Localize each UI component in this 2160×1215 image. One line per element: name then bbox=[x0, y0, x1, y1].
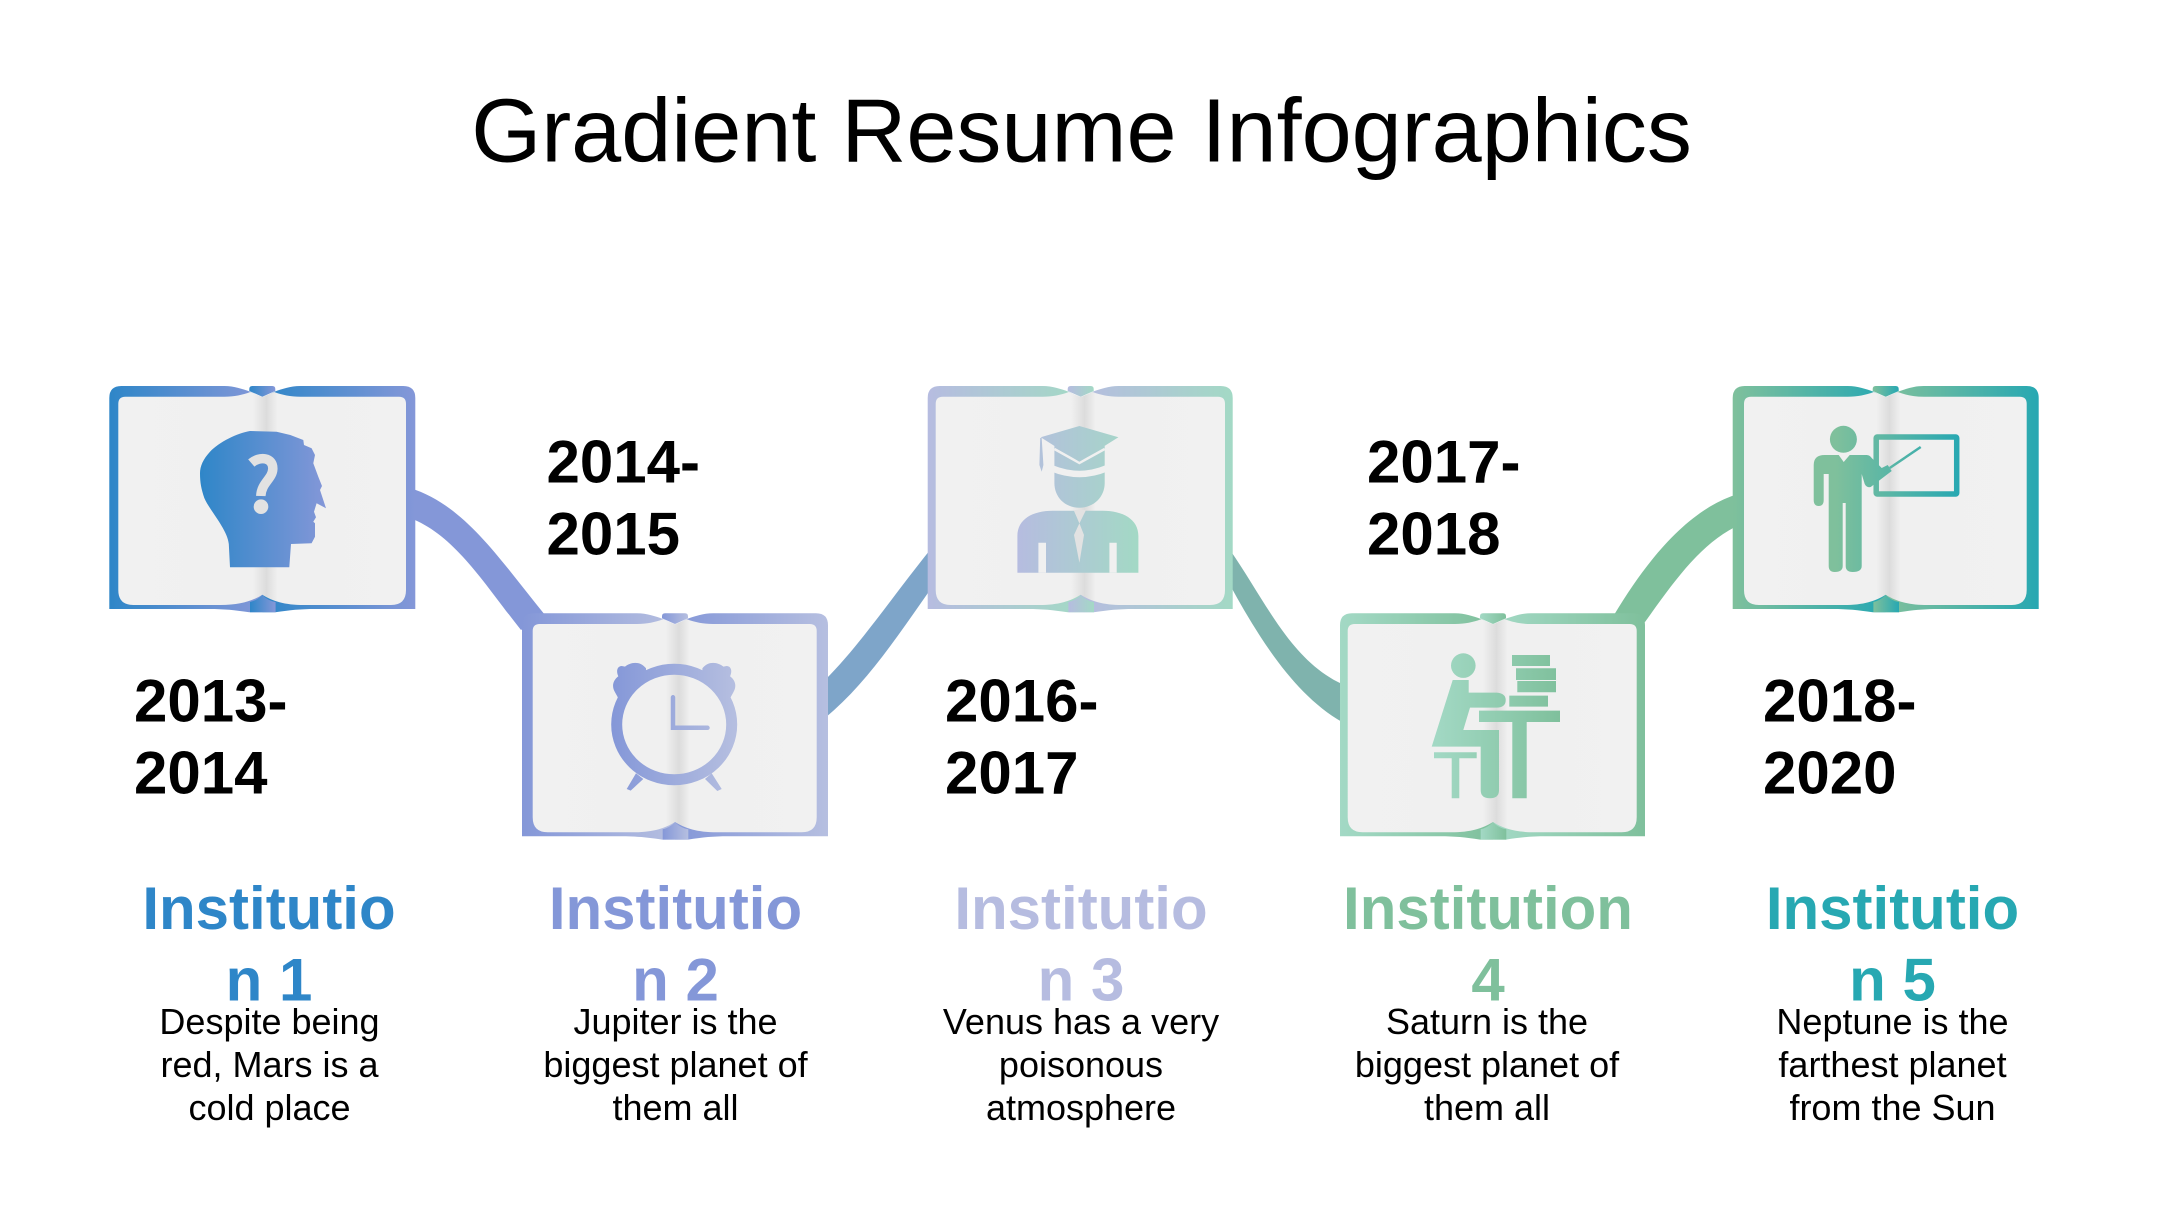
heading: institution 5: Institutio bbox=[1766, 875, 2019, 942]
icon: graduate bbox=[1017, 426, 1138, 573]
years: 2017-2018: 2018 bbox=[1367, 500, 1500, 568]
title: Gradient Resume Infographics bbox=[471, 82, 1692, 182]
connector: book 2 to book 3 bbox=[825, 550, 930, 718]
description: institution 5: farthest planet bbox=[1778, 1044, 2007, 1085]
years: 2013-2014: 2014 bbox=[134, 740, 268, 807]
years: 2017-2018: 2017- bbox=[1367, 429, 1520, 496]
panel: book 3 with graduate icon bbox=[928, 386, 1233, 612]
description: institution 4: them all bbox=[1424, 1087, 1550, 1128]
description: institution 3: atmosphere bbox=[986, 1087, 1176, 1128]
heading: institution 1: Institutio bbox=[142, 875, 396, 942]
description: institution 2: biggest planet of bbox=[543, 1044, 809, 1085]
heading: institution 5: n 5 bbox=[1849, 946, 1936, 1014]
heading: institution 4: Institution bbox=[1343, 875, 1633, 942]
connector: book 4 to book 5 bbox=[1614, 495, 1735, 622]
panel: book 5 with teacher icon bbox=[1733, 386, 2039, 612]
years: 2018-2020: 2018- bbox=[1763, 668, 1916, 735]
connector: book 3 to book 4 bbox=[1230, 550, 1342, 722]
description: institution 1: red, Mars is a bbox=[160, 1044, 380, 1085]
description: institution 2: them all bbox=[612, 1087, 739, 1128]
panel: book 4 with student at desk icon bbox=[1340, 613, 1645, 840]
description: institution 5: from the Sun bbox=[1789, 1087, 1996, 1128]
years: 2016-2017: 2016- bbox=[945, 668, 1098, 735]
years: 2013-2014: 2013- bbox=[134, 668, 287, 735]
icon: head with question mark bbox=[200, 431, 326, 567]
panel: book 2 with alarm clock icon bbox=[522, 613, 828, 840]
heading: institution 3: n 3 bbox=[1038, 946, 1124, 1014]
years: 2014-2015: 2015 bbox=[546, 500, 680, 568]
description: institution 1: Despite being bbox=[159, 1001, 380, 1042]
heading: institution 4: 4 bbox=[1471, 946, 1505, 1014]
description: institution 3: Venus has a very bbox=[943, 1001, 1219, 1042]
icon: alarm clock bbox=[613, 663, 735, 791]
description: institution 2: Jupiter is the bbox=[573, 1001, 778, 1042]
heading: institution 2: Institutio bbox=[549, 875, 802, 942]
connector: book 1 to book 2 bbox=[410, 488, 545, 630]
heading: institution 3: Institutio bbox=[954, 875, 1208, 942]
heading: institution 2: n 2 bbox=[632, 946, 719, 1014]
years: 2018-2020: 2020 bbox=[1763, 740, 1896, 807]
description: institution 5: Neptune is the bbox=[1776, 1001, 2009, 1042]
description: institution 1: cold place bbox=[188, 1087, 351, 1128]
panel: book 1 with head icon bbox=[109, 386, 415, 612]
heading: institution 1: n 1 bbox=[226, 946, 312, 1014]
years: 2014-2015: 2014- bbox=[546, 429, 700, 496]
description: institution 4: Saturn is the bbox=[1386, 1001, 1588, 1042]
icon: student at desk with book stack bbox=[1432, 653, 1560, 798]
description: institution 4: biggest planet of bbox=[1355, 1044, 1620, 1085]
description: institution 3: poisonous bbox=[999, 1044, 1163, 1085]
icon: teacher pointing at board bbox=[1814, 426, 1957, 572]
years: 2016-2017: 2017 bbox=[945, 740, 1078, 807]
